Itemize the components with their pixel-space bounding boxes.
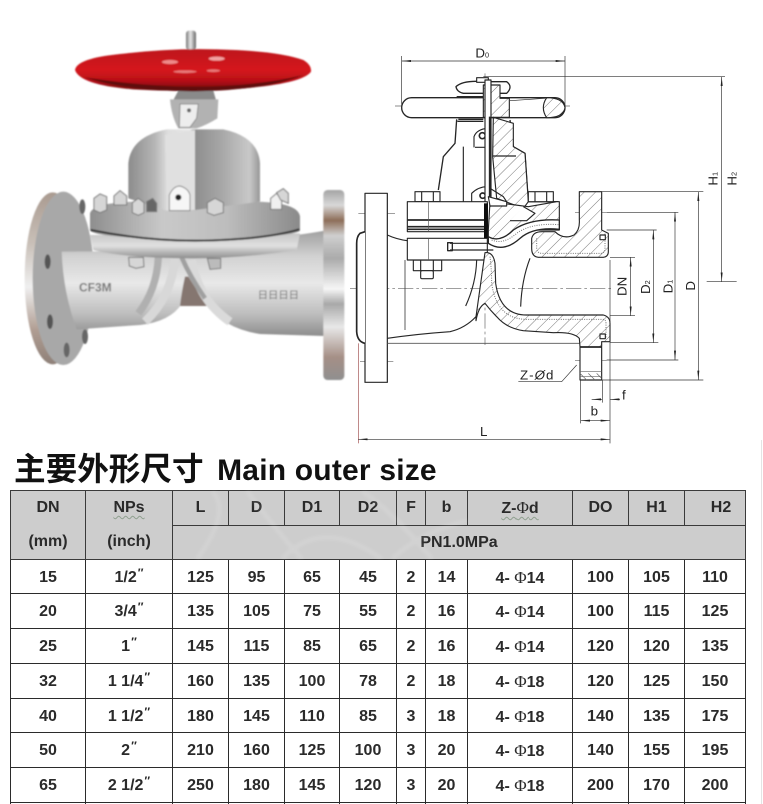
dimension table: 105 [643,568,670,586]
dimension table: 135 [243,673,270,690]
cast body mark CF3M: CF3M [79,281,112,295]
dimension table: 16 [438,603,455,620]
dimension table: 2 1/2″ [108,774,150,794]
dimension table: 100 [355,742,381,759]
dimension table: D2 [358,499,378,516]
dimension table: 120 [643,638,670,655]
dimension table: 145 [243,708,270,724]
dimension table: 4- Φ18 [496,672,544,691]
dimension table: 3/4″ [114,600,144,620]
dimension table: 200 [702,777,728,794]
dimension table: (inch) [107,533,151,550]
dimension table: 180 [243,777,270,794]
dimension table: (mm) [28,533,68,550]
dimension table: 18 [438,708,455,724]
dimension table: 160 [243,742,270,759]
dimension labels [475,46,740,439]
dimension table: 40 [39,708,57,724]
dimension table: 170 [643,777,670,794]
dimension table: 20 [438,742,455,759]
center lines [350,73,613,362]
dimension table: 75 [303,603,321,620]
dimension table: F [406,499,416,516]
dimension table: 20 [39,603,57,620]
dimension labels: D [683,281,698,291]
right flange section [532,192,608,257]
dimension table: 1″ [121,635,137,655]
dimension table: 85 [303,638,321,655]
dimension table: 115 [644,603,669,620]
dimension table: 4- Φ18 [496,741,544,760]
dimension table: 4- Φ14 [496,568,544,586]
dimension table: 65 [303,568,321,586]
dimension table: b [442,499,451,516]
dimension table: 4- Φ18 [496,776,544,795]
dimension table: 1/2″ [114,566,144,586]
dimension table: 1 1/4″ [108,670,150,690]
bonnet lug with hole [169,186,190,211]
dimension table: 3 [407,777,415,794]
hand wheel section [402,78,565,121]
dimension table: 95 [248,568,265,586]
dimension table: 125 [643,673,670,690]
bonnet neck [170,91,218,128]
dimension table: 150 [702,673,728,690]
dimension table: 100 [587,568,614,586]
dimension table: 115 [244,638,269,655]
body flange with gasket [90,202,300,258]
dimension lines [358,56,737,443]
bolts [94,189,288,269]
dimension table: PN1.0MPa [420,534,498,550]
dimension labels: D2 [638,280,653,294]
dimension table: 155 [643,742,670,759]
dimension table: Z-Φd [501,498,539,517]
title: 主要外形尺寸 Main outer size [14,451,437,487]
dimension table: 135 [187,603,214,620]
dimension table: 195 [702,742,728,759]
dimension table: 2 [407,673,415,690]
dimension table: 2 [407,603,415,620]
dimension table: 175 [702,708,728,724]
body flanges and gasket [407,202,493,260]
dimension table: DN [36,499,60,516]
dimension table: 2 [407,638,415,655]
dimension table: 250 [187,777,214,794]
dimension labels: f [622,387,626,402]
dimension table: 20 [438,777,455,794]
dimension table: 105 [243,603,270,620]
dimension table: 65 [39,777,57,794]
dimension table: 125 [299,742,325,759]
dimension labels: D0 [475,46,489,61]
dimension table: 125 [187,568,214,586]
dimension table: 120 [587,673,614,690]
dimension table: 4- Φ18 [496,706,544,726]
dimension table: 120 [587,638,614,655]
cast body mark: 日日日日 [258,290,299,301]
dimension table: 65 [359,638,377,655]
dimension table: 2 [407,568,415,586]
dimension table: H2 [711,499,731,516]
lower body lining section [466,253,610,380]
bonnet outline [438,80,558,237]
dimension table: D [251,499,262,516]
dimension table: 1 1/2″ [108,704,150,724]
dimension table: L [196,499,205,516]
dimension table: 32 [39,673,57,690]
dimension table: DO [588,499,612,516]
dimension table: 110 [702,568,728,586]
dimension table [10,490,746,804]
dimension table: 3 [407,708,415,724]
bonnet dome [128,129,260,211]
dimension table: 180 [187,708,214,724]
valve left flange [25,192,94,365]
dimension labels: L [480,424,487,439]
dimension table: 125 [702,603,728,620]
dimension table: 160 [187,673,214,690]
dimension labels: b [591,404,598,419]
dimension table: 4- Φ14 [496,637,544,656]
red hand wheel [75,49,311,91]
left flange [357,193,580,382]
dimension table: 45 [359,568,377,586]
dimension table: 120 [355,777,381,794]
dimension table: 135 [702,638,728,655]
dimension table: 200 [587,777,614,794]
bonnet bolts [413,192,553,279]
dimension table: 50 [39,742,57,759]
valve right flange [323,190,344,380]
dimension labels: H1 [705,172,720,186]
dimension table: H1 [646,499,667,516]
dimension table: 4- Φ14 [496,602,544,621]
dimension table: 3 [407,742,415,759]
dimension table: 140 [587,708,614,724]
dimension table: 15 [39,568,57,586]
dimension table: 100 [299,673,325,690]
dimension table: 14 [438,568,455,586]
dimension table: 135 [643,708,670,724]
dimension table: 145 [299,777,325,794]
dimension table: NPs [113,499,145,516]
dimension table: 145 [187,638,214,655]
dimension labels: D1 [661,280,676,293]
valve body pipes [62,231,325,336]
dimension table: 55 [359,603,377,620]
dimension table: 140 [587,742,614,759]
hand wheel stem [186,31,196,50]
dimension table: 2″ [121,739,137,759]
dimension labels: Z-Ød [520,367,554,382]
dimension table: 100 [587,603,614,620]
diaphragm with bonnet compressor [488,197,559,247]
dimension table: 18 [438,673,455,690]
dimension labels: H2 [725,172,740,186]
dimension table: 85 [359,708,377,724]
dimension table: 25 [39,638,57,655]
dimension labels: DN [615,277,630,296]
dimension table: D1 [302,499,322,516]
photo: stainless steel diaphragm valve [25,31,344,380]
dimension table: 16 [438,638,455,655]
dimension table: 110 [299,708,325,724]
dimension table: 78 [359,673,377,690]
dimension table: 210 [187,742,214,759]
technical cross-section drawing [350,46,740,443]
